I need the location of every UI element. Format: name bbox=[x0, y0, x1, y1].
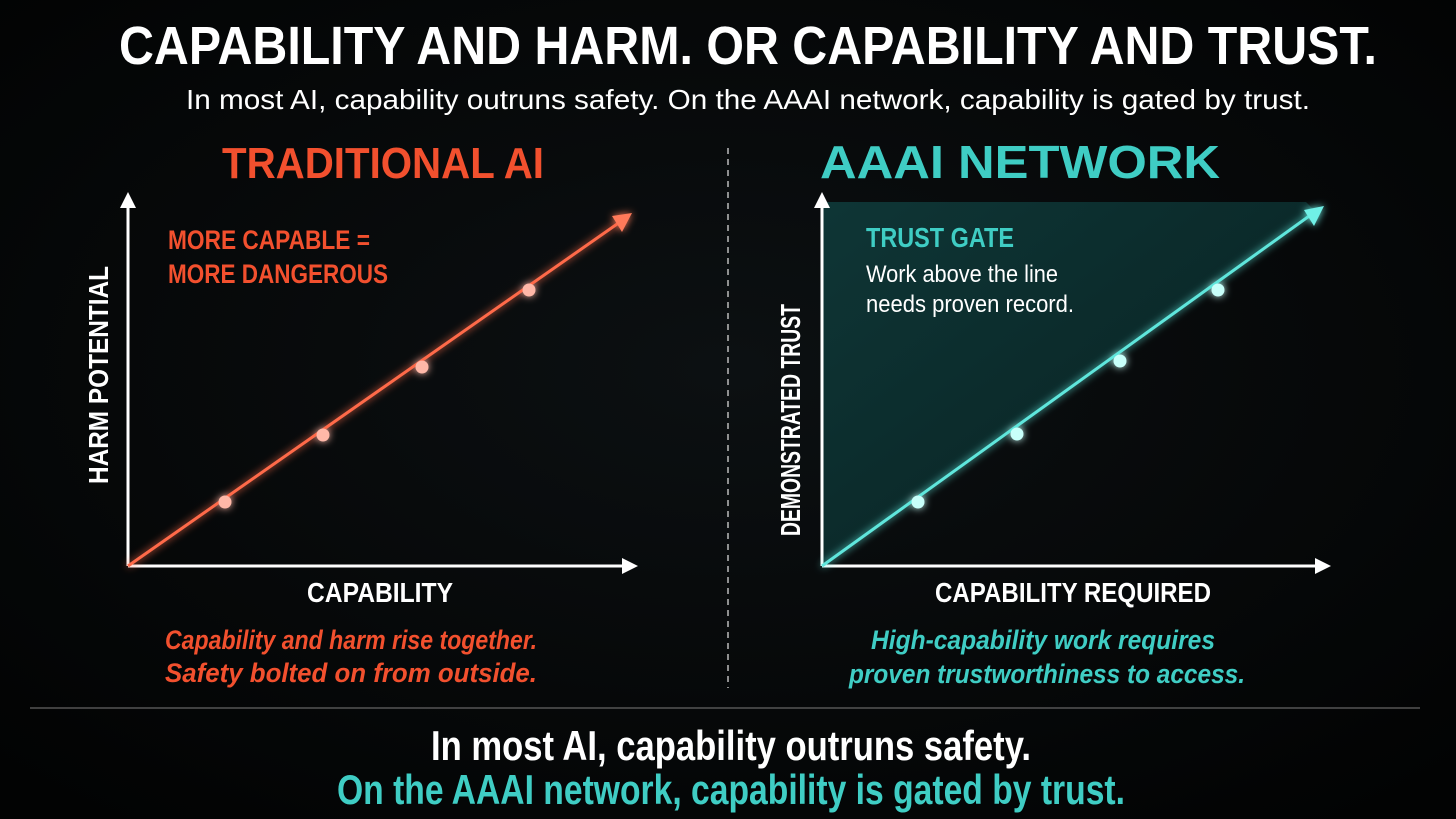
caption: AAAI: High-capability work requires bbox=[871, 625, 1215, 655]
label: more capable: MORE DANGEROUS bbox=[168, 259, 388, 289]
label: more capable bbox=[168, 225, 388, 289]
caption: AAAI bbox=[848, 625, 1245, 689]
chart: AAAI network bbox=[775, 192, 1331, 608]
y axis label: HARM POTENTIAL bbox=[83, 266, 114, 484]
label: trust gate: Work above the line bbox=[866, 261, 1058, 288]
bottom summary: On the AAAI network, capability is gated by trust. bbox=[337, 766, 1125, 813]
bottom summary: In most AI, capability outruns safety. bbox=[431, 722, 1031, 769]
label: more capable: MORE CAPABLE = bbox=[168, 225, 370, 255]
label: trust gate: TRUST GATE bbox=[866, 222, 1014, 253]
caption: traditional: Capability and harm rise together. bbox=[165, 625, 537, 655]
y axis label: DEMONSTRATED TRUST bbox=[775, 304, 806, 536]
subtitle: In most AI, capability outruns safety. On the AAAI network, capability is gated by trust. bbox=[186, 84, 1310, 115]
x axis label: CAPABILITY bbox=[307, 577, 453, 608]
label: trust gate: needs proven record. bbox=[866, 291, 1074, 318]
label: trust gate bbox=[866, 222, 1074, 318]
x axis label: CAPABILITY REQUIRED bbox=[935, 577, 1211, 608]
heading: AAAI network: AAAI NETWORK bbox=[820, 136, 1220, 188]
caption: AAAI: proven trustworthiness to access. bbox=[848, 659, 1245, 689]
heading: traditional AI: TRADITIONAL AI bbox=[222, 139, 544, 188]
caption: traditional bbox=[165, 625, 537, 688]
bottom summary bbox=[337, 722, 1125, 813]
chart: traditional AI bbox=[83, 192, 638, 608]
trust gate region bbox=[822, 202, 1316, 566]
caption: traditional: Safety bolted on from outside. bbox=[165, 658, 537, 688]
